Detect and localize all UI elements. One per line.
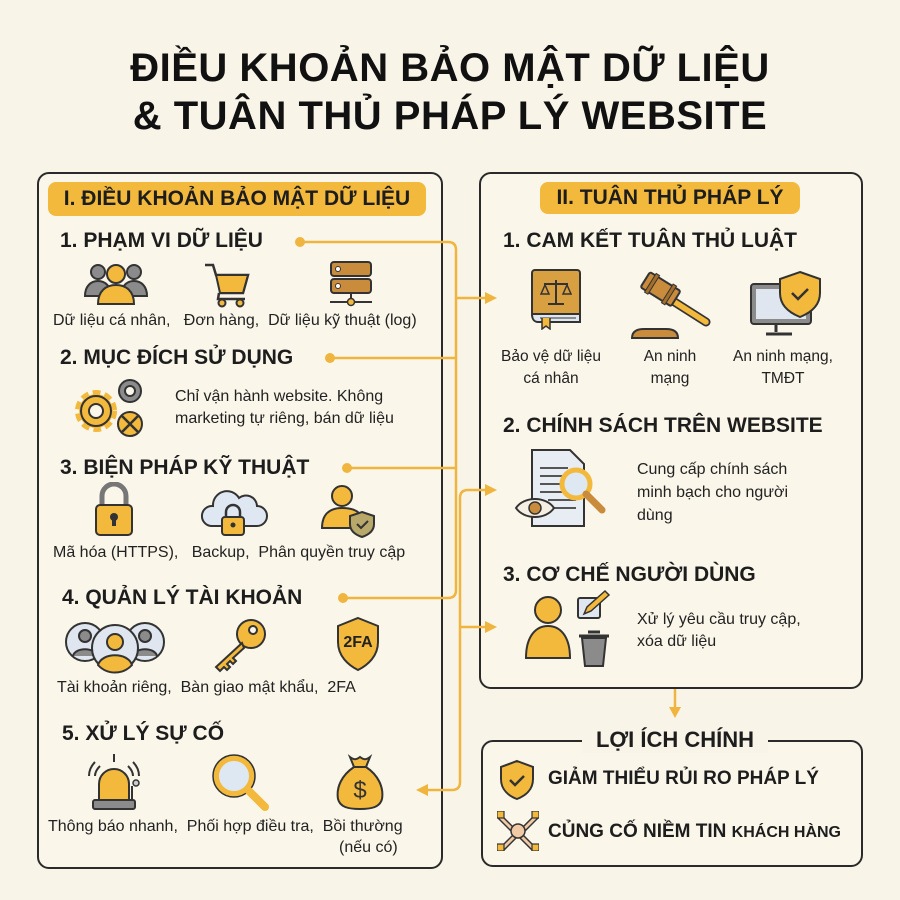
panel: key benefits <box>481 740 863 867</box>
icon: monitor shield <box>750 271 821 336</box>
labels: technical measures: Mã hóa (HTTPS), Backup, Phân quyền truy cập <box>53 544 405 561</box>
header: section I <box>48 182 426 216</box>
heading: R3: 3. CƠ CHẾ NGƯỜI DÙNG <box>503 563 756 586</box>
text: user mechanism: xóa dữ liệu <box>637 633 716 650</box>
icon: gears <box>75 379 143 437</box>
icon: gavel <box>631 272 710 339</box>
text: policy: dùng <box>637 507 673 524</box>
icon: law book <box>531 269 581 330</box>
icon: magnifier <box>212 754 269 811</box>
icon: cart <box>205 264 250 308</box>
icon: hands <box>497 811 539 851</box>
labels: data scope: Dữ liệu cá nhân, Đơn hàng, Dữ liệu kỹ thuật (log) <box>53 312 417 329</box>
text: benefit 2: CỦNG CỐ NIỀM TIN KHÁCH HÀNG <box>548 821 841 842</box>
icon: user with edit and trash <box>525 590 610 667</box>
text: purpose: Chỉ vận hành website. Không <box>175 388 383 405</box>
labels: incident: Thông báo nhanh, Phối hợp điều tra, Bồi thường <box>48 818 403 835</box>
labels: laws: cá nhân <box>523 370 579 387</box>
title <box>130 45 770 138</box>
icon: cloud backup <box>200 490 268 536</box>
heading: R1: 1. CAM KẾT TUÂN THỦ LUẬT <box>503 229 797 252</box>
icon: people <box>84 264 148 305</box>
labels: laws: Bảo vệ dữ liệu <box>501 348 601 365</box>
icon: key <box>214 619 266 672</box>
text: mạng <box>651 370 689 387</box>
text: An ninh <box>644 348 696 365</box>
panel: data security terms <box>37 172 443 869</box>
labels: accounts: Tài khoản riêng, Bàn giao mật khẩu, 2FA <box>57 679 356 696</box>
labels: incident <box>48 818 403 856</box>
icon: shield check <box>500 760 534 800</box>
icon: 2FA shield: 2FA <box>343 634 373 651</box>
heading: 3: 3. BIỆN PHÁP KỸ THUẬT <box>60 456 309 479</box>
labels: laws <box>501 348 601 387</box>
header: section II: II. TUÂN THỦ PHÁP LÝ <box>556 186 784 209</box>
heading: R2: 2. CHÍNH SÁCH TRÊN WEBSITE <box>503 414 823 437</box>
labels: incident: (nếu có) <box>339 839 398 856</box>
text: TMĐT <box>761 370 805 387</box>
icon: accounts <box>65 622 165 674</box>
icon: money bag <box>336 754 384 810</box>
icon: padlock <box>95 482 133 536</box>
text: policy <box>637 461 788 524</box>
heading: 1: 1. PHẠM VI DỮ LIỆU <box>60 229 263 252</box>
icon: 2FA shield <box>337 616 379 672</box>
heading: 5: 5. XỬ LÝ SỰ CỐ <box>62 722 224 745</box>
header: section I: I. ĐIỀU KHOẢN BẢO MẬT DỮ LIỆU <box>64 187 410 210</box>
heading: 2: 2. MỤC ĐÍCH SỬ DỤNG <box>60 346 293 369</box>
text: An ninh mạng, <box>733 348 833 365</box>
text: policy: Cung cấp chính sách <box>637 461 787 478</box>
text: policy: minh bạch cho người <box>637 484 788 501</box>
icon: alarm <box>88 754 140 810</box>
icon: document with eye and magnifier <box>514 449 606 527</box>
text: purpose <box>175 388 394 427</box>
header: section II <box>540 182 800 214</box>
text: purpose: marketing tự riêng, bán dữ liệu <box>175 410 394 427</box>
text: user mechanism <box>637 611 801 650</box>
title: & TUÂN THỦ PHÁP LÝ WEBSITE <box>133 94 767 138</box>
icon: server <box>330 261 372 306</box>
heading: 4: 4. QUẢN LÝ TÀI KHOẢN <box>62 586 302 609</box>
icon: user with shield <box>321 485 375 538</box>
panel: legal compliance <box>479 172 863 689</box>
icon: money bag: $ <box>353 777 367 804</box>
title: ĐIỀU KHOẢN BẢO MẬT DỮ LIỆU <box>130 46 770 90</box>
text: benefit 1: GIẢM THIỂU RỦI RO PHÁP LÝ <box>548 768 819 789</box>
heading: benefits: LỢI ÍCH CHÍNH <box>596 727 754 752</box>
text: user mechanism: Xử lý yêu cầu truy cập, <box>637 611 801 628</box>
